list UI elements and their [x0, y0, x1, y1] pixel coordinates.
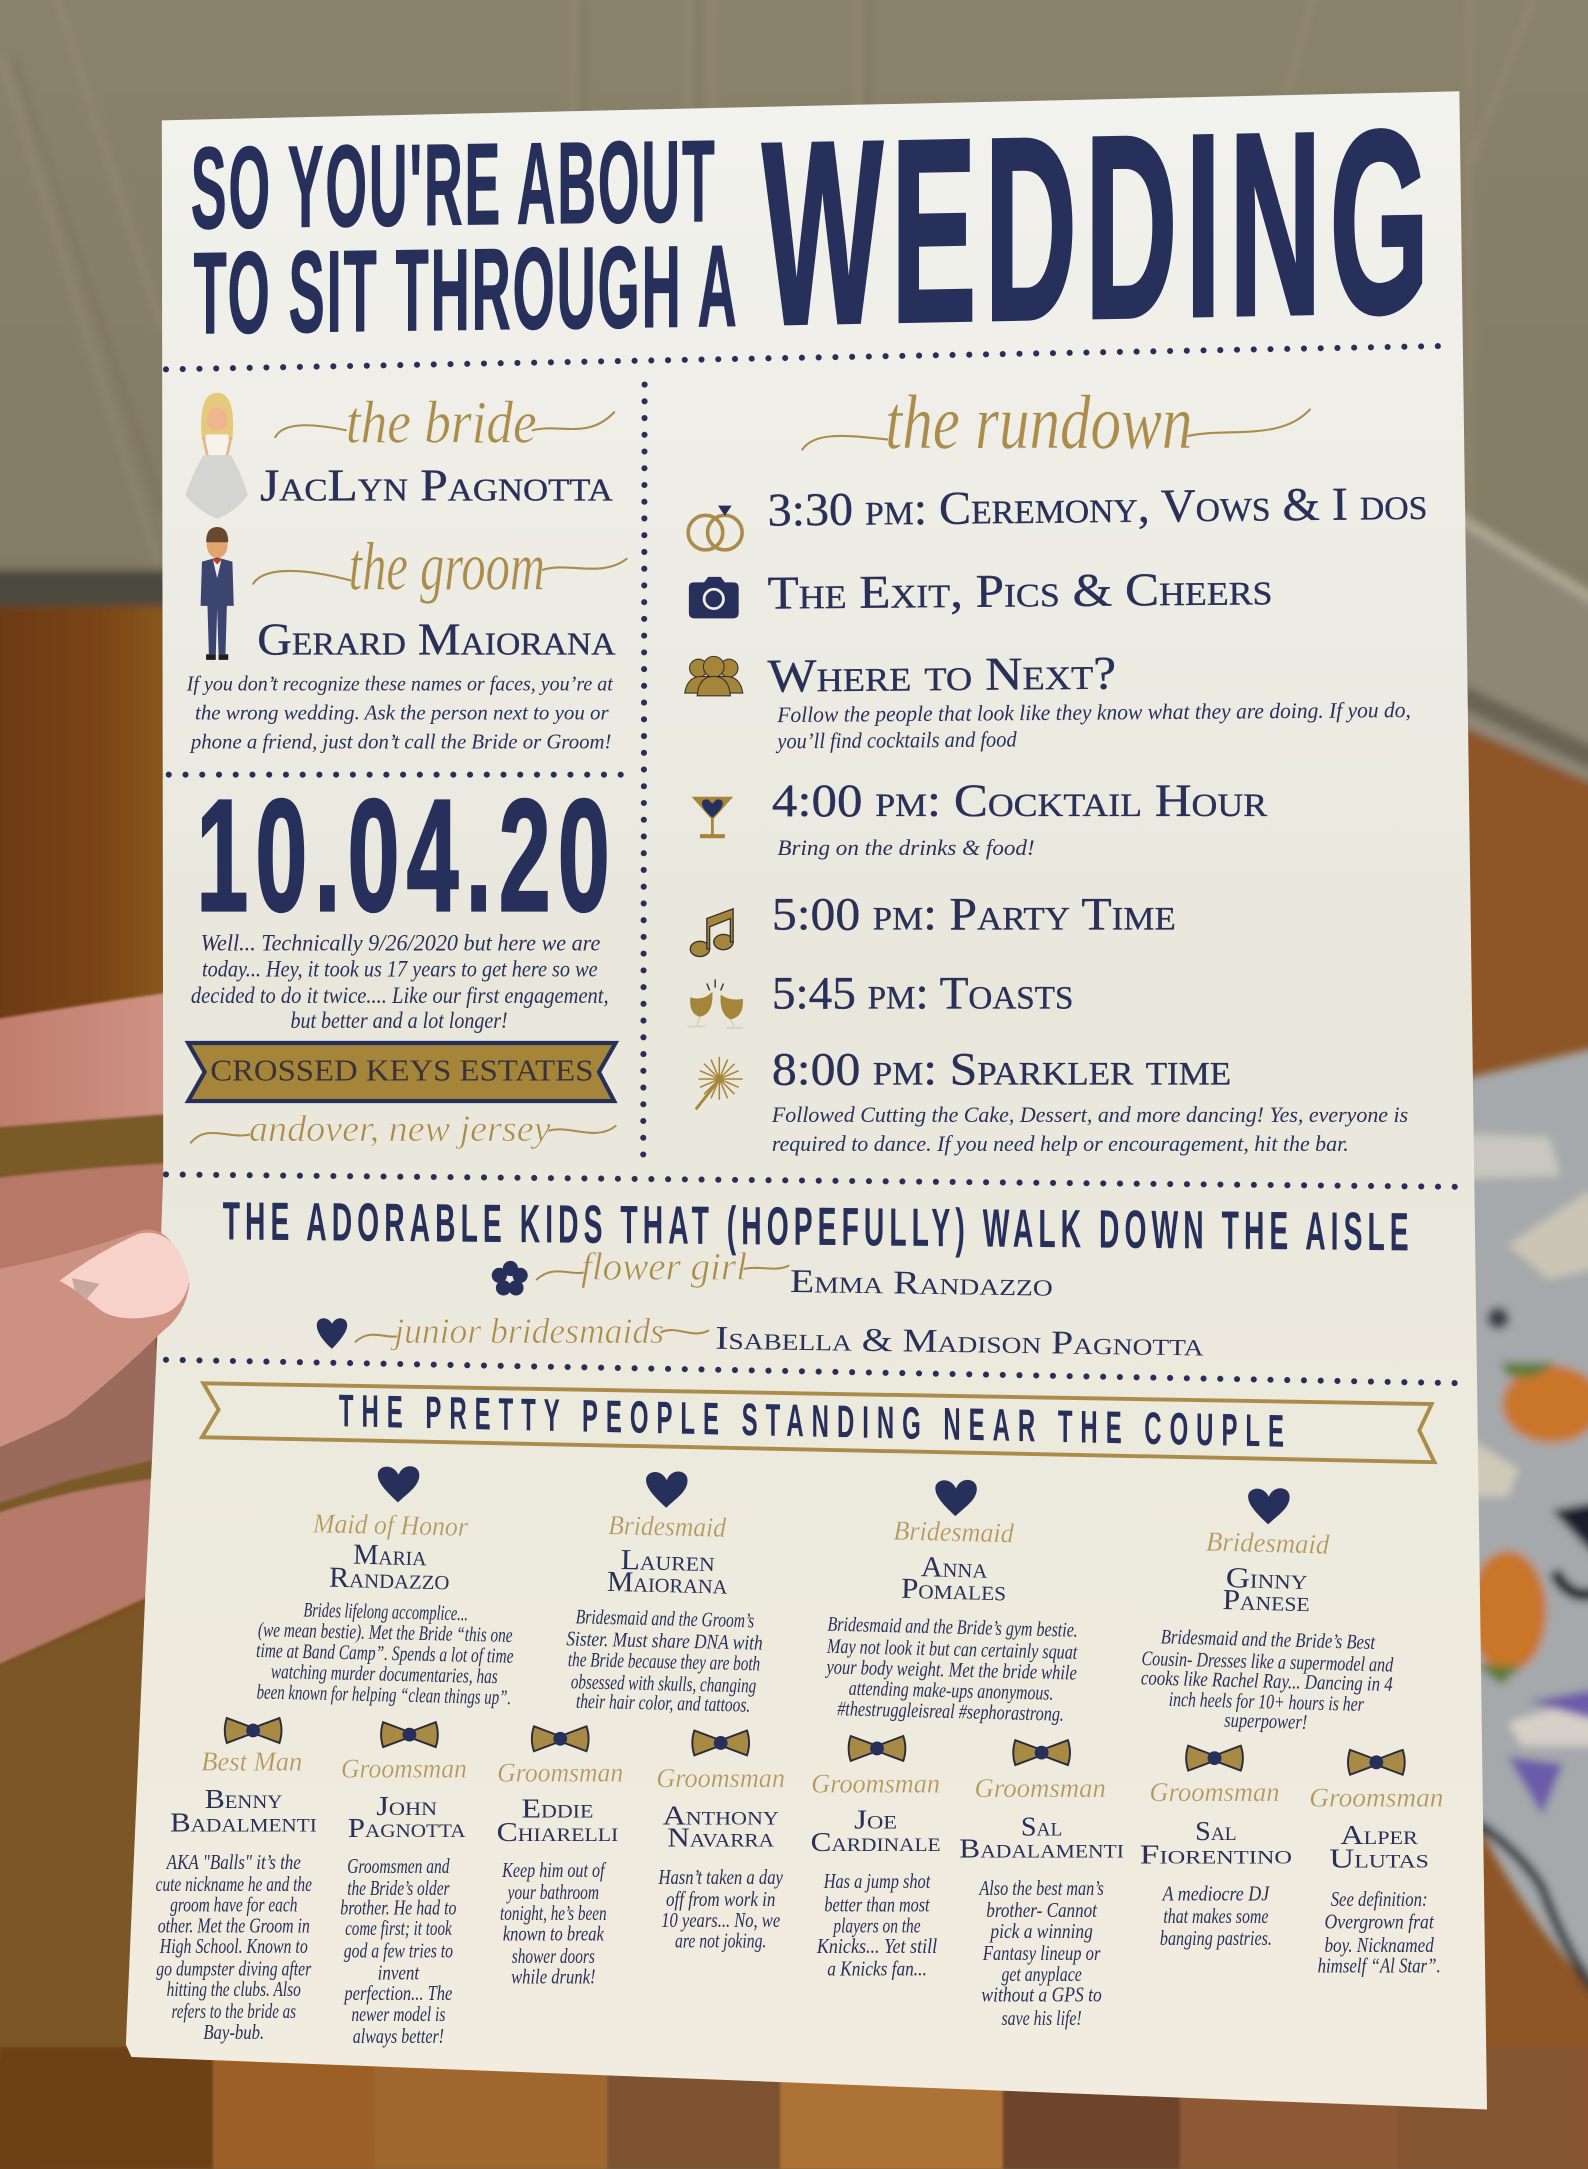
cocktail note: Bring on the drinks & food! — [777, 835, 1035, 860]
groomsman: Anthony Navarra: off from work in — [666, 1889, 775, 1911]
panel: kids — [223, 1191, 1414, 1364]
groomsman: John Pagnotta: invent — [378, 1962, 420, 1984]
groomsman: Benny Badalmenti: hitting the clubs. Also — [167, 1979, 301, 2001]
flower girl script: flower girl — [581, 1246, 747, 1289]
bridesmaid: Ginny Panese: Ginny — [1226, 1562, 1308, 1596]
groomsman: John Pagnotta: perfection... The — [343, 1983, 452, 2005]
flower girl name: Emma Randazzo — [790, 1263, 1053, 1304]
venue banner: CROSSED KEYS ESTATES — [210, 1053, 593, 1087]
groomsman: Eddie Chiarelli: Groomsman — [497, 1757, 623, 1788]
dotted dividers — [166, 346, 1466, 1383]
bridesmaid: Ginny Panese: Bridesmaid — [1206, 1525, 1330, 1560]
bridesmaid: Maria Randazzo — [255, 1463, 518, 1709]
groomsman: John Pagnotta: Groomsmen and — [347, 1856, 450, 1878]
bridesmaid: Maria Randazzo: (we mean bestie). Met the Bride “this one — [258, 1619, 513, 1647]
paper card — [126, 91, 1487, 2110]
bridesmaid: Maria Randazzo: watching murder documentaries, has — [271, 1661, 498, 1688]
groomsman: Joe Cardinale: Has a jump shot — [823, 1871, 931, 1893]
note text — [186, 671, 614, 753]
sparkler row: 8:00 pm: Sparkler time — [772, 1043, 1231, 1095]
groomsman: Eddie Chiarelli: while drunk! — [511, 1967, 596, 1989]
bridesmaid: Lauren Maiorana: Bridesmaid and the Groom’s — [576, 1606, 754, 1632]
icon: bride — [185, 393, 248, 519]
groomsman: Benny Badalmenti: High School. Known to — [159, 1936, 308, 1958]
bridesmaid: Lauren Maiorana: Bridesmaid — [608, 1509, 726, 1543]
groomsman: Benny Badalmenti: Badalmenti — [170, 1806, 317, 1837]
bridesmaid: Maria Randazzo: Brides lifelong accomplice... — [303, 1600, 468, 1625]
groomsman: Sal Fiorentino — [1140, 1746, 1292, 1950]
groomsman: Alper Ulutas: Ulutas — [1329, 1842, 1429, 1873]
date: 10.04.20 — [196, 766, 617, 944]
icon: groom — [201, 527, 234, 660]
cocktail row: 4:00 pm: Cocktail Hour — [772, 775, 1267, 827]
groomsman: Eddie Chiarelli: shower doors — [512, 1946, 595, 1968]
note text: the wrong wedding. Ask the person next to you or — [195, 700, 609, 724]
bridesmaid: Lauren Maiorana: Maiorana — [607, 1566, 728, 1601]
bridesmaid: Maria Randazzo: Randazzo — [329, 1562, 450, 1596]
junior bridesmaids script: junior bridesmaids — [390, 1311, 664, 1351]
bridesmaid: Maria Randazzo: time at Band Camp”. Spends a lot of time — [256, 1640, 514, 1668]
groomsman: John Pagnotta: the Bride’s older — [347, 1878, 450, 1900]
icon: sparkler — [696, 1057, 743, 1109]
groomsman: John Pagnotta: Groomsman — [341, 1753, 467, 1784]
groomsman: Sal Badalamenti: Fantasy lineup or — [982, 1943, 1101, 1965]
groomsman: John Pagnotta: god a few tries to — [344, 1940, 453, 1962]
groomsman: Benny Badalmenti: Bay-bub. — [203, 2022, 264, 2044]
bridesmaid: Lauren Maiorana — [565, 1469, 767, 1717]
ceremony row: 3:30 pm: Ceremony, Vows & I dos — [767, 478, 1428, 537]
groomsman: Anthony Navarra — [656, 1730, 785, 1953]
groomsman: Sal Badalamenti: brother- Cannot — [986, 1900, 1098, 1922]
note text: If you don’t recognize these names or faces, you’re at — [186, 671, 614, 695]
groomsman: Joe Cardinale: a Knicks fan... — [827, 1958, 927, 1980]
groomsman: Joe Cardinale: Joe — [854, 1804, 897, 1835]
the groom script: the groom — [349, 527, 545, 604]
note text: phone a friend, just don’t call the Bride or Groom! — [189, 729, 611, 753]
icon: rings — [688, 506, 742, 550]
bridesmaid: Anna Pomales: Bridesmaid and the Bride’s gym bestie. — [827, 1614, 1078, 1642]
bridesmaid: Anna Pomales: Anna — [921, 1551, 988, 1585]
groomsman: Sal Fiorentino: Fiorentino — [1140, 1838, 1292, 1869]
bridesmaid: Ginny Panese — [1140, 1485, 1398, 1736]
exit row: The Exit, Pics & Cheers — [767, 563, 1273, 620]
panel: the couple — [185, 390, 627, 753]
bridesmaid: Ginny Panese: Cousin- Dresses like a supermodel and — [1141, 1648, 1394, 1677]
date note: decided to do it twice.... Like our first engagement, — [191, 983, 609, 1008]
groomsman: Sal Fiorentino: banging pastries. — [1160, 1928, 1272, 1950]
icon: cocktail — [692, 797, 733, 838]
groomsman: Alper Ulutas: Overgrown frat — [1324, 1911, 1435, 1933]
icon: toasting glasses — [687, 979, 743, 1028]
where to next row: Where to Next? — [767, 648, 1116, 703]
bridesmaid: Ginny Panese: cooks like Rachel Ray... Dancing in 4 — [1141, 1667, 1393, 1696]
bridesmaid: Ginny Panese: Panese — [1222, 1584, 1310, 1618]
groomsman: John Pagnotta: come first; it took — [345, 1918, 452, 1940]
bridesmaid: Ginny Panese: Bridesmaid and the Bride’s Best — [1160, 1626, 1376, 1654]
groomsman: Eddie Chiarelli: your bathroom — [506, 1882, 599, 1904]
title: TO SIT THROUGH A — [194, 221, 739, 358]
groomsman: Sal Badalamenti: save his life! — [1001, 2008, 1082, 2030]
groomsman: John Pagnotta — [340, 1722, 467, 2048]
background: patterned rug — [1452, 1046, 1588, 1999]
flower girl script — [537, 1246, 788, 1289]
groomsman: Benny Badalmenti: refers to the bride as — [172, 2001, 296, 2023]
panel: date and venue — [188, 766, 617, 1150]
icon: people — [685, 656, 743, 696]
groomsman: John Pagnotta: Pagnotta — [348, 1812, 466, 1843]
groomsman: Sal Fiorentino: A mediocre DJ — [1161, 1884, 1271, 1906]
groomsman: Benny Badalmenti: cute nickname he and the — [156, 1874, 312, 1896]
groomsman: John Pagnotta: newer model is — [351, 2004, 445, 2026]
title: lead-in text — [191, 116, 739, 358]
rundown script heading: the rundown — [885, 379, 1192, 465]
hand fingers behind paper — [0, 992, 173, 1667]
groomsman: Joe Cardinale: better than most — [824, 1895, 931, 1917]
groomsman: Alper Ulutas: Groomsman — [1309, 1782, 1443, 1813]
groomsman: Anthony Navarra: are not joking. — [675, 1931, 766, 1953]
bridesmaid: Anna Pomales: May not look it but can certainly squat — [826, 1636, 1079, 1664]
groom name: Gerard Maiorana — [257, 613, 616, 664]
groomsman: Benny Badalmenti: groom have for each — [170, 1895, 297, 1917]
groomsman: Alper Ulutas — [1309, 1750, 1443, 1978]
bridesmaid: Lauren Maiorana: Sister. Must share DNA with — [566, 1628, 763, 1655]
groomsman: John Pagnotta: brother. He had to — [340, 1897, 456, 1919]
bridesmaid: Ginny Panese: superpower! — [1224, 1710, 1308, 1734]
bridesmaid: Maria Randazzo: Maria — [353, 1539, 427, 1572]
bridesmaid: Anna Pomales: your body weight. Met the bride while — [825, 1656, 1077, 1685]
groomsman: Benny Badalmenti: AKA "Balls" it’s the — [165, 1852, 301, 1874]
groomsman: Anthony Navarra: Navarra — [667, 1822, 774, 1853]
panel: the rundown — [685, 379, 1428, 1156]
where to next note — [775, 697, 1411, 753]
sparkler note — [771, 1102, 1408, 1156]
groomsman: Benny Badalmenti — [156, 1718, 317, 2044]
groomsman: Alper Ulutas: himself “Al Star”. — [1318, 1956, 1441, 1978]
bridesmaid: Ginny Panese: inch heels for 10+ hours is her — [1168, 1689, 1365, 1716]
icon: heart — [317, 1318, 347, 1349]
bridesmaid: Lauren Maiorana: their hair color, and tattoos. — [576, 1691, 750, 1717]
groomsman: Sal Badalamenti: pick a winning — [989, 1921, 1093, 1943]
groomsman: Joe Cardinale: Groomsman — [811, 1768, 940, 1799]
bridesmaid: Anna Pomales: attending make-ups anonymous. — [849, 1678, 1054, 1705]
groomsman: Anthony Navarra: Hasn’t taken a day — [658, 1867, 784, 1889]
date note: Well... Technically 9/26/2020 but here we are — [201, 930, 600, 955]
groomsman: Sal Fiorentino: Sal — [1195, 1815, 1237, 1846]
groomsman: Sal Badalamenti: without a GPS to — [981, 1985, 1102, 2007]
groomsman: Sal Badalamenti: get anyplace — [1001, 1964, 1082, 1986]
groomsman: Sal Badalamenti: Also the best man’s — [978, 1878, 1104, 1900]
groomsman: Eddie Chiarelli: Chiarelli — [497, 1816, 618, 1847]
bridesmaid: Lauren Maiorana: Lauren — [620, 1544, 715, 1578]
bridesmaid: Lauren Maiorana: the Bride because they are both — [568, 1649, 760, 1675]
groomsman: John Pagnotta: always better! — [353, 2026, 444, 2048]
groomsman: Benny Badalmenti: Benny — [205, 1783, 282, 1814]
groomsman: Alper Ulutas: boy. Nicknamed — [1324, 1935, 1434, 1957]
date note — [191, 930, 609, 1033]
groomsman: Eddie Chiarelli: tonight, he’s been — [500, 1903, 607, 1925]
groomsman: Sal Fiorentino: that makes some — [1163, 1906, 1268, 1928]
location script: andover, new jersey — [249, 1109, 551, 1150]
location script — [191, 1109, 616, 1150]
the bride script: the bride — [346, 390, 537, 457]
groomsman: Joe Cardinale: Cardinale — [811, 1826, 941, 1857]
bridesmaid: Anna Pomales: Pomales — [901, 1573, 1007, 1607]
sparkler note: Followed Cutting the Cake, Dessert, and more dancing! Yes, everyone is — [771, 1102, 1408, 1127]
bridesmaid: Lauren Maiorana: obsessed with skulls, changing — [571, 1671, 756, 1697]
groomsman: Joe Cardinale: Knicks... Yet still — [816, 1936, 937, 1958]
groomsman: Eddie Chiarelli — [497, 1726, 623, 1989]
where to next note: you’ll find cocktails and food — [775, 726, 1018, 753]
sparkler note: required to dance. If you need help or encouragement, hit the bar. — [772, 1131, 1349, 1156]
title — [191, 77, 1437, 380]
groomsman: Anthony Navarra: Groomsman — [656, 1762, 785, 1793]
groomsman: Sal Badalamenti: Sal — [1021, 1811, 1062, 1842]
junior bridesmaids names: Isabella & Madison Pagnotta — [715, 1320, 1204, 1364]
finger with painted nail — [0, 1229, 190, 1450]
bridesmaid: Maria Randazzo: Maid of Honor — [312, 1507, 469, 1542]
toasts row: 5:45 pm: Toasts — [772, 967, 1073, 1019]
bridesmaid: Anna Pomales: Bridesmaid — [893, 1515, 1014, 1548]
groomsman: Anthony Navarra: 10 years... No, we — [661, 1910, 780, 1932]
groomsman: Sal Badalamenti — [959, 1740, 1124, 2030]
party row: 5:00 pm: Party Time — [772, 889, 1176, 941]
the bride script — [275, 390, 614, 457]
date note: today... Hey, it took us 17 years to get here so we — [202, 957, 598, 982]
groomsman: Eddie Chiarelli: Keep him out of — [501, 1860, 607, 1882]
groomsman: Benny Badalmenti: go dumpster diving after — [156, 1958, 312, 1980]
groomsman: Sal Badalamenti: Groomsman — [975, 1772, 1106, 1803]
groomsman: Eddie Chiarelli: Eddie — [521, 1793, 593, 1824]
bridesmaid: Anna Pomales: #thestruggleisreal #sephorastrong. — [837, 1698, 1064, 1726]
date note: but better and a lot longer! — [290, 1008, 508, 1033]
party heading ribbon — [202, 1383, 1434, 1462]
icon: camera — [689, 577, 739, 618]
groomsman: Benny Badalmenti: other. Met the Groom in — [158, 1915, 310, 1937]
title: SO YOU'RE ABOUT — [191, 116, 717, 253]
bride name: JacLyn Pagnotta — [260, 460, 613, 511]
groomsman: Sal Fiorentino: Groomsman — [1150, 1776, 1280, 1807]
bridesmaid: Anna Pomales — [824, 1477, 1082, 1726]
groomsman: Alper Ulutas: See definition: — [1331, 1889, 1428, 1911]
groomsman: Joe Cardinale: players on the — [832, 1915, 921, 1937]
bridesmaid: Maria Randazzo: been known for helping “clean things up”. — [256, 1681, 511, 1709]
groomsman: Eddie Chiarelli: known to break — [503, 1924, 604, 1946]
groomsman: John Pagnotta: John — [376, 1790, 437, 1821]
groomsman: Alper Ulutas: Alper — [1340, 1819, 1418, 1850]
background: wood planks at bottom — [0, 2047, 1588, 2169]
where to next note: Follow the people that look like they know what they are doing. If you do, — [776, 697, 1411, 727]
groomsman: Benny Badalmenti: Best Man — [201, 1746, 302, 1777]
groomsman: Joe Cardinale — [811, 1736, 941, 1980]
panel: wedding party — [156, 1383, 1443, 2048]
groomsman: Anthony Navarra: Anthony — [663, 1800, 779, 1831]
icon: music note — [690, 909, 733, 957]
venue banner — [188, 1043, 616, 1101]
groomsman: Sal Badalamenti: Badalamenti — [959, 1833, 1124, 1864]
icon: flower — [492, 1261, 528, 1295]
